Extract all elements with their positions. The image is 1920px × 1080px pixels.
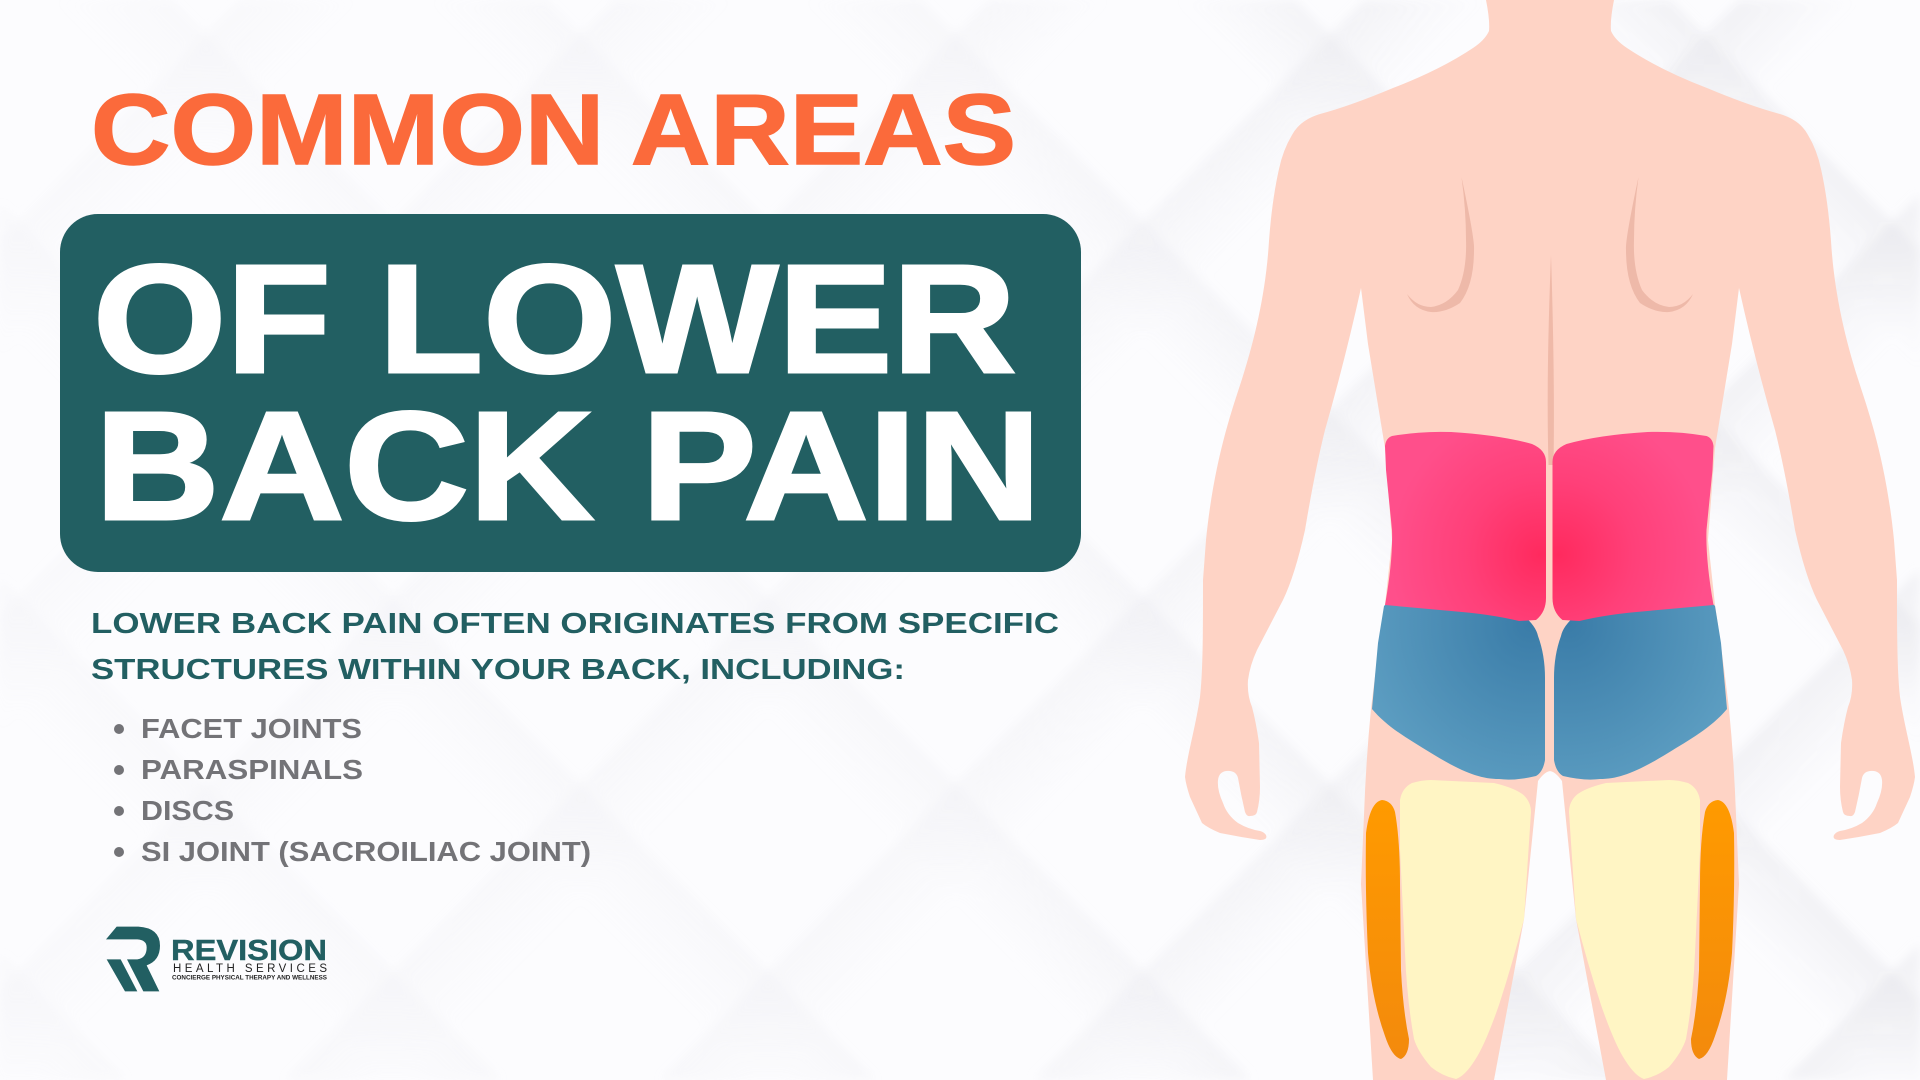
title line: of lower: OF LOWER [93, 233, 1016, 405]
shoulder blade left [1407, 177, 1474, 312]
sacrum cleft [1533, 622, 1566, 645]
title line: common areas: COMMON AREAS [91, 74, 1016, 186]
body silhouette right half [1549, 0, 1915, 1080]
list item: si joint: SI JOINT (SACROILIAC JOINT) [141, 836, 591, 867]
intro text: LOWER BACK PAIN OFTEN ORIGINATES FROM SPECIFIC [91, 608, 1059, 640]
pain area: si joint left (blue) [1372, 603, 1545, 780]
list item: discs: DISCS [141, 795, 234, 826]
pain area: si joint right (blue) [1554, 603, 1727, 780]
shoulder blade right [1626, 177, 1693, 312]
yellow area left thigh [1400, 780, 1531, 1079]
title panel background [60, 214, 1081, 572]
orange area left thigh [1366, 800, 1409, 1059]
bullet list [114, 713, 591, 867]
yellow area right thigh [1569, 780, 1700, 1079]
list item: paraspinals: PARASPINALS [141, 754, 363, 785]
pain area: paraspinals right (pink) [1552, 432, 1714, 621]
logo tagline: CONCIERGE PHYSICAL THERAPY AND WELLNESS [172, 974, 328, 982]
pain area: paraspinals left (pink) [1385, 432, 1546, 621]
body silhouette left half [1185, 0, 1551, 1080]
logo subtitle: HEALTH SERVICES [173, 963, 327, 975]
intro text [91, 608, 1059, 686]
spine [1548, 255, 1554, 465]
title line: back pain: BACK PAIN [95, 380, 1041, 552]
logo: revision health services [106, 927, 328, 991]
orange area right thigh [1691, 800, 1734, 1059]
list item: facet joints: FACET JOINTS [141, 713, 362, 744]
logo wordmark: REVISION [171, 935, 327, 967]
title panel: of lower back pain [60, 214, 1081, 572]
icon: R mark [106, 927, 160, 991]
body illustration [1185, 0, 1915, 1080]
intro text: STRUCTURES WITHIN YOUR BACK, INCLUDING: [91, 654, 905, 686]
